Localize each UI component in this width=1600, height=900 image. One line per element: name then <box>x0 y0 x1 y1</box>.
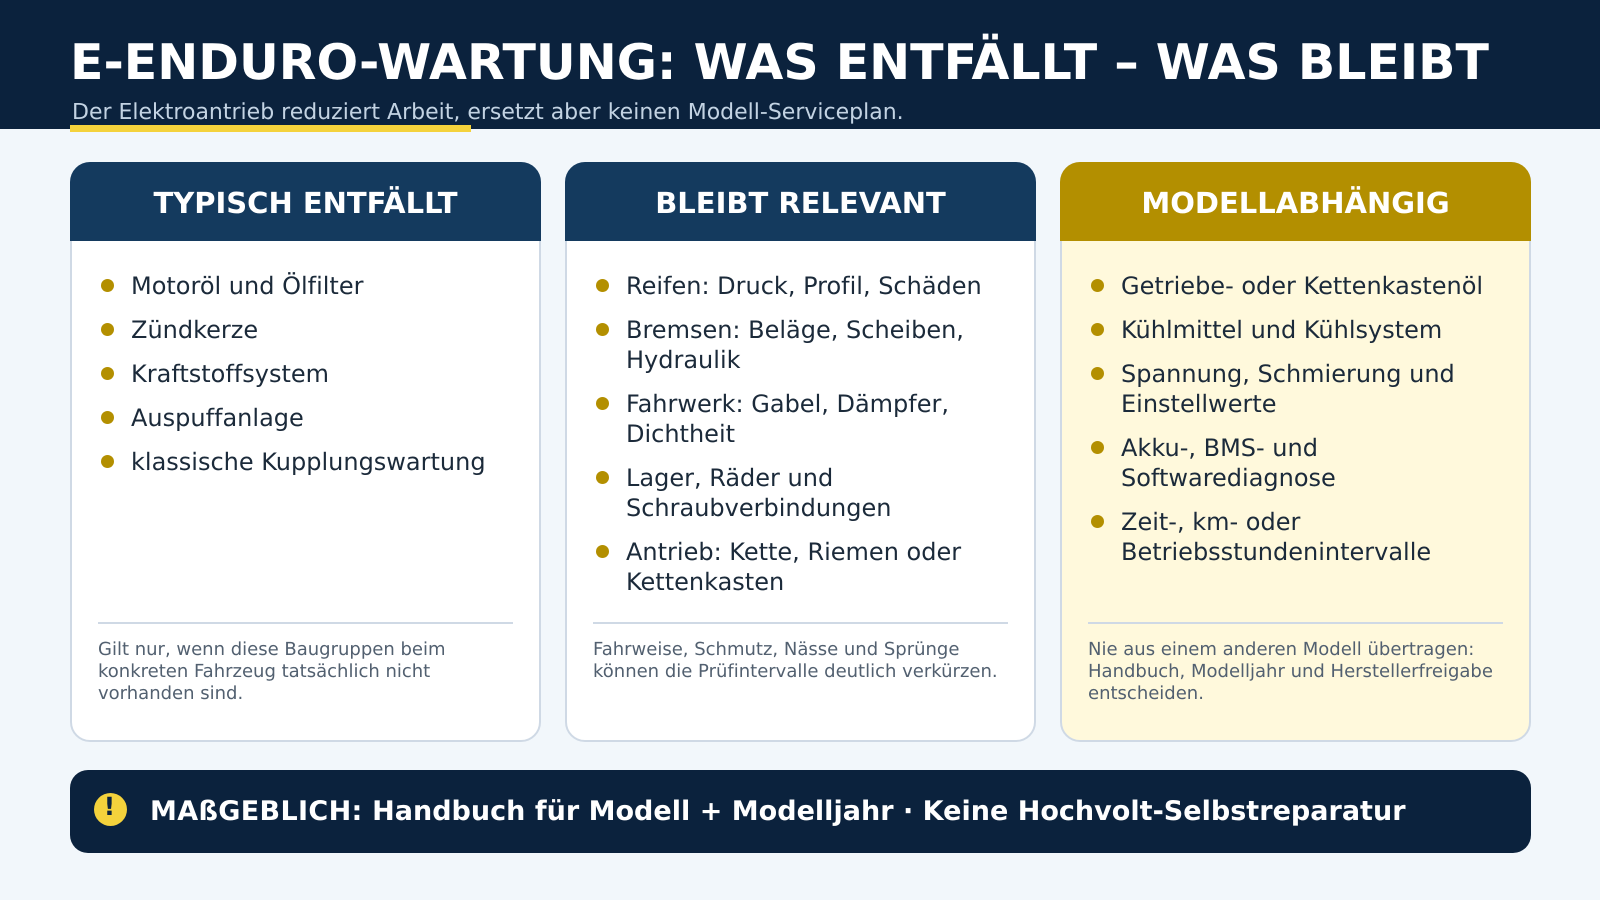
note: Nie aus einem anderen Modell übertragen: <box>1088 639 1474 660</box>
note <box>1088 639 1493 704</box>
list item: Akku-, BMS- und <box>1121 434 1318 462</box>
list item: Hydraulik <box>626 346 741 374</box>
list item <box>596 538 962 596</box>
note <box>593 639 998 682</box>
header band <box>0 0 1600 129</box>
list item: Antrieb: Kette, Riemen oder <box>626 538 961 566</box>
list item: Getriebe- oder Kettenkastenöl <box>1121 272 1483 300</box>
list item: Kühlmittel und Kühlsystem <box>1121 316 1442 344</box>
title: E-ENDURO-WARTUNG: WAS ENTFÄLLT – WAS BLEIBT <box>70 34 1489 91</box>
list item: Motoröl und Ölfilter <box>131 272 363 300</box>
list item: Bremsen: Beläge, Scheiben, <box>626 316 964 344</box>
list item: Betriebsstundenintervalle <box>1121 538 1431 566</box>
list item: Reifen: Druck, Profil, Schäden <box>626 272 982 300</box>
note: Gilt nur, wenn diese Baugruppen beim <box>98 639 446 660</box>
panel heading <box>1060 162 1531 241</box>
list item <box>596 390 949 448</box>
footer message: MAßGEBLICH: Handbuch für Modell + Modelljahr · Keine Hochvolt-Selbstreparatur <box>150 796 1406 827</box>
panel: typisch entfällt <box>70 162 541 742</box>
list item <box>1091 508 1431 566</box>
list item: klassische Kupplungswartung <box>131 448 486 476</box>
panel: modellabhängig <box>1060 162 1531 742</box>
panel heading: BLEIBT RELEVANT <box>655 186 946 220</box>
list item: Zündkerze <box>131 316 258 344</box>
list item: Kettenkasten <box>626 568 784 596</box>
list item: Auspuffanlage <box>131 404 304 432</box>
note: entscheiden. <box>1088 683 1204 704</box>
list item: Zeit-, km- oder <box>1121 508 1300 536</box>
subtitle: Der Elektroantrieb reduziert Arbeit, ersetzt aber keinen Modell-Serviceplan. <box>72 100 904 125</box>
list item: Fahrwerk: Gabel, Dämpfer, <box>626 390 949 418</box>
icon: warning: ! <box>104 792 115 821</box>
panel: bleibt relevant <box>565 162 1036 742</box>
list item <box>1091 360 1455 418</box>
list item: Schraubverbindungen <box>626 494 891 522</box>
note: Fahrweise, Schmutz, Nässe und Sprünge <box>593 639 959 660</box>
list item: Kraftstoffsystem <box>131 360 329 388</box>
list item: Lager, Räder und <box>626 464 833 492</box>
note: Handbuch, Modelljahr und Herstellerfreigabe <box>1088 661 1493 682</box>
list item: Einstellwerte <box>1121 390 1276 418</box>
note: vorhanden sind. <box>98 683 243 704</box>
note: konkreten Fahrzeug tatsächlich nicht <box>98 661 430 682</box>
list item <box>1091 434 1336 492</box>
panel heading <box>565 162 1036 241</box>
list item <box>596 464 891 522</box>
icon: warning <box>94 793 127 826</box>
note <box>98 639 446 704</box>
list item <box>596 316 964 374</box>
panel heading: MODELLABHÄNGIG <box>1141 186 1450 220</box>
footer banner <box>70 770 1531 853</box>
accent underline <box>70 125 471 132</box>
panel heading: TYPISCH ENTFÄLLT <box>153 186 458 220</box>
list item: Dichtheit <box>626 420 735 448</box>
panel heading <box>70 162 541 241</box>
list item: Spannung, Schmierung und <box>1121 360 1455 388</box>
note: können die Prüfintervalle deutlich verkürzen. <box>593 661 998 682</box>
list item: Softwarediagnose <box>1121 464 1336 492</box>
